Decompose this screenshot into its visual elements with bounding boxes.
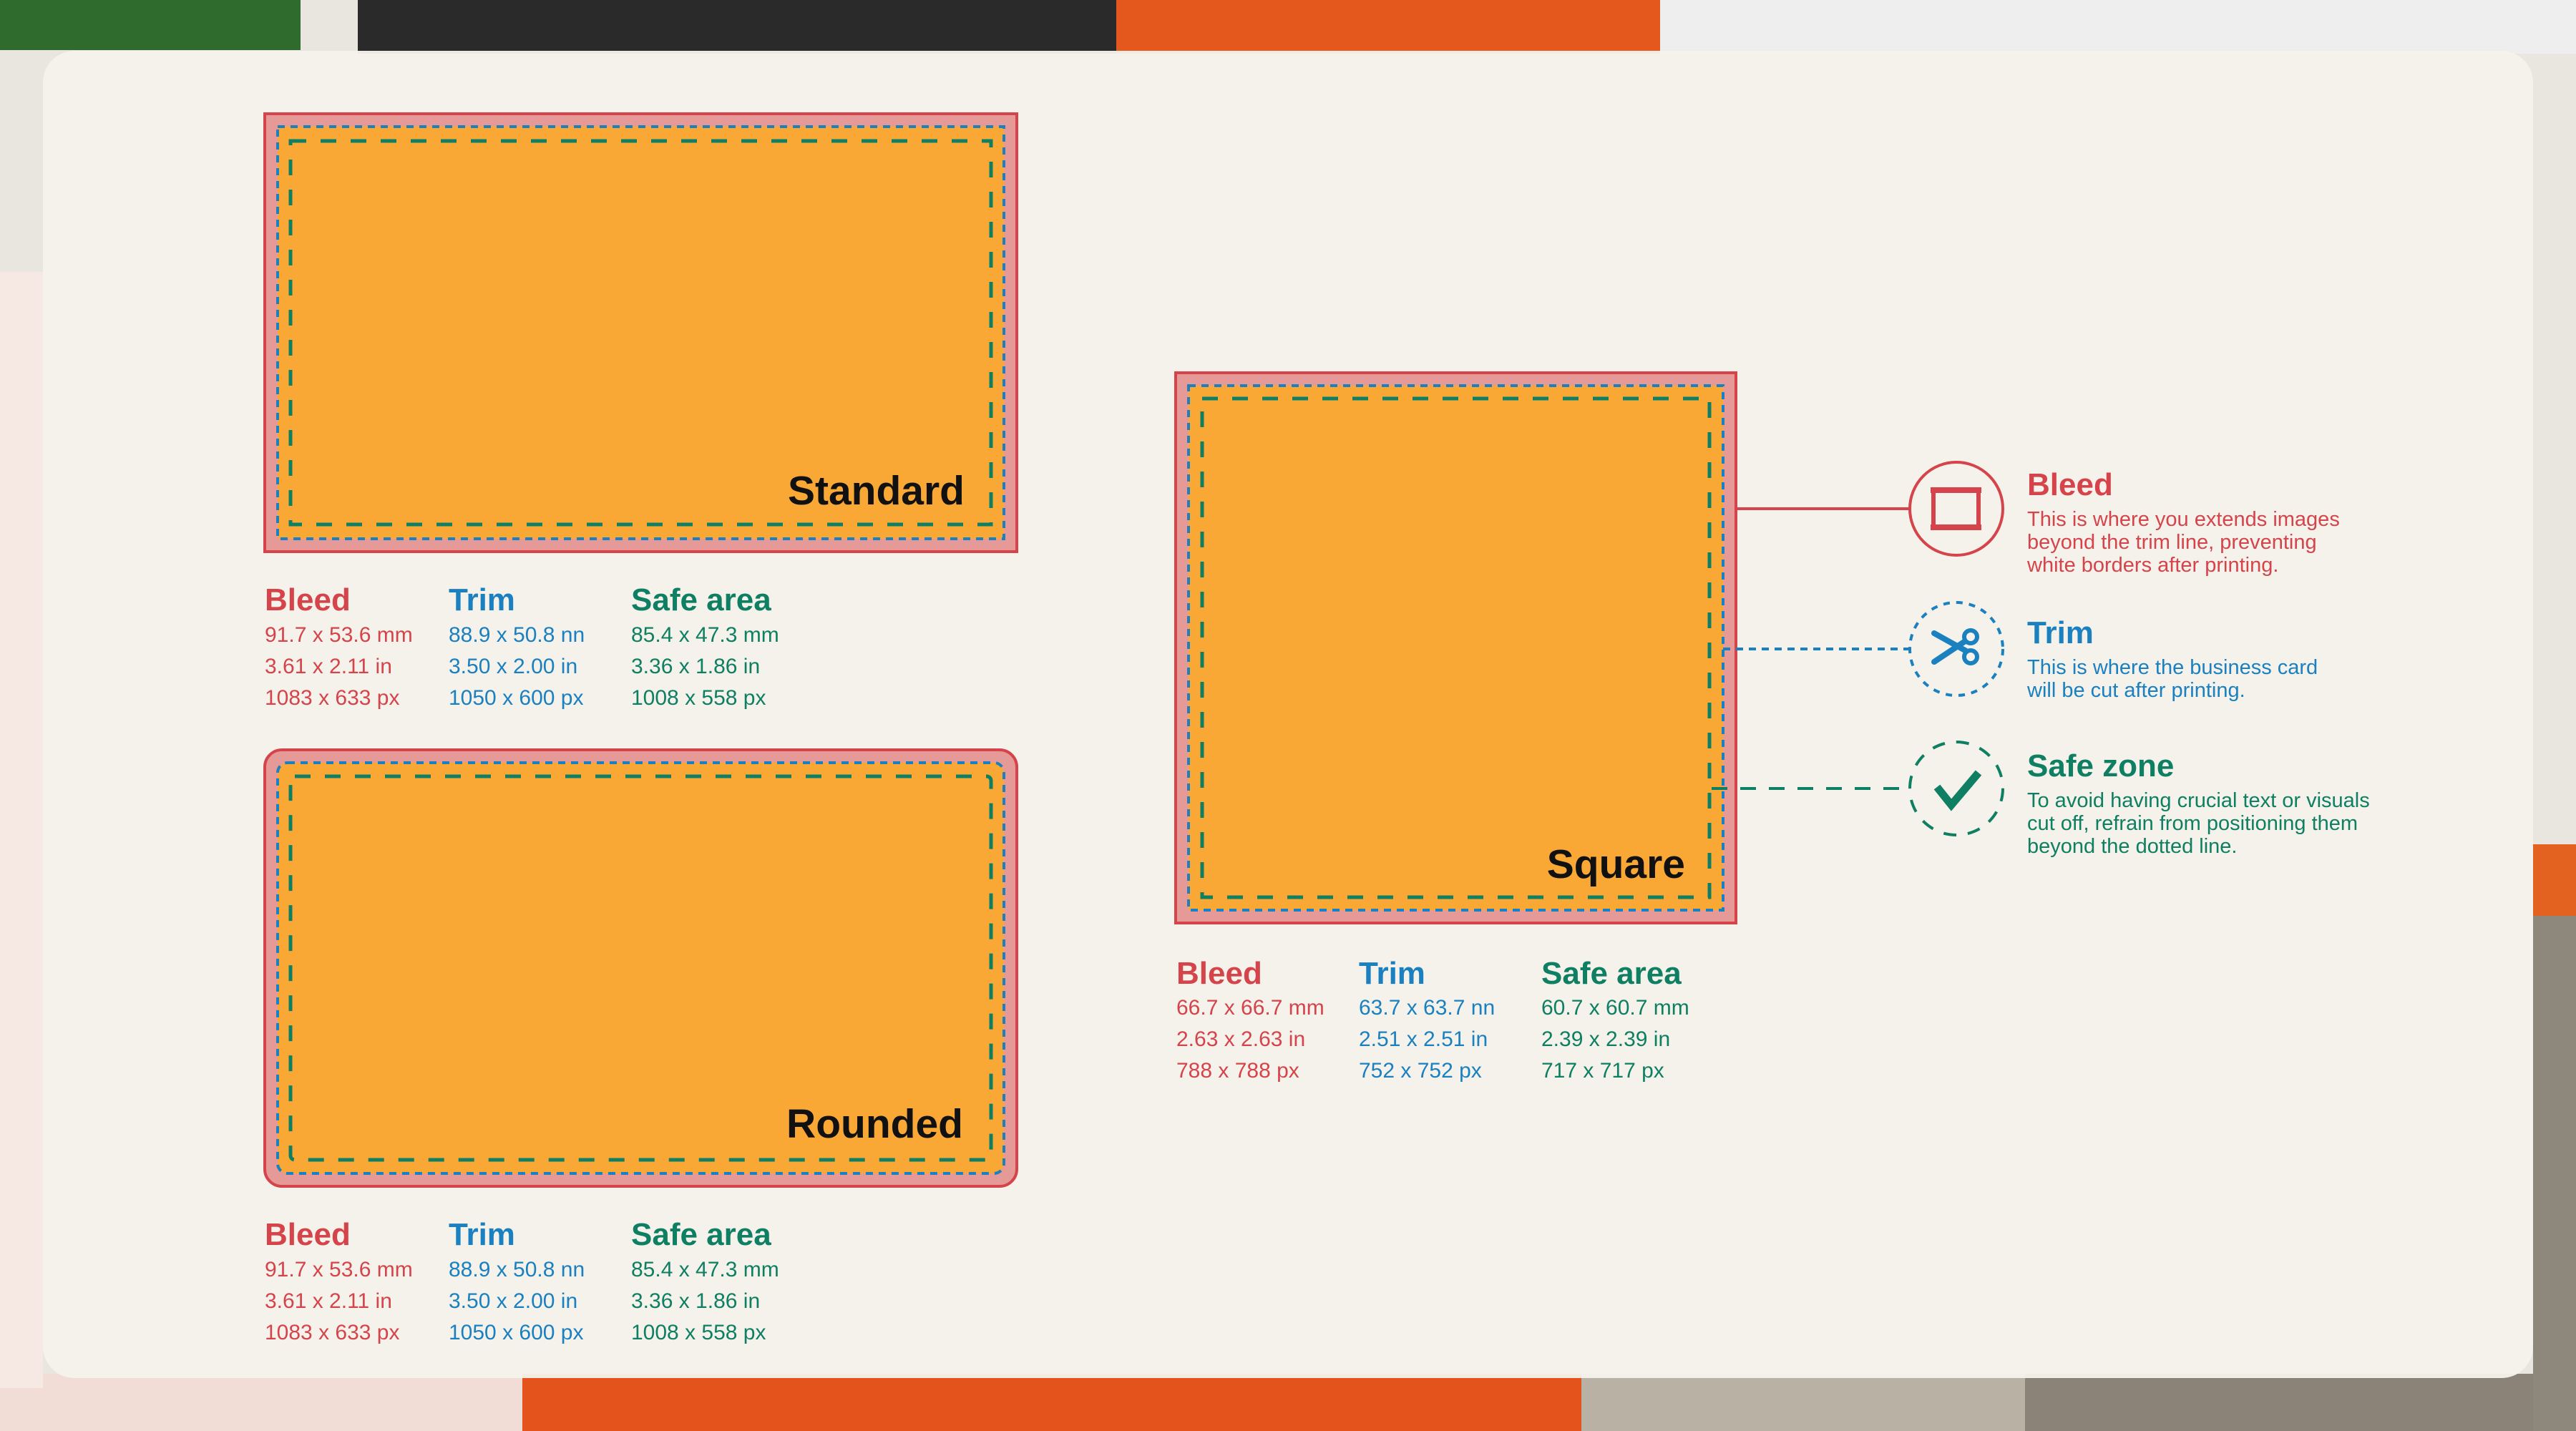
legend text: trim: Trim xyxy=(2027,615,2094,650)
specs: square: 788 x 788 px xyxy=(1176,1059,1299,1083)
icon: trim scissors xyxy=(1910,602,2003,695)
specs: square: 752 x 752 px xyxy=(1359,1059,1482,1083)
specs: standard: 85.4 x 47.3 mm xyxy=(631,623,779,647)
specs: square: 2.39 x 2.39 in xyxy=(1541,1027,1670,1051)
connector: trim line xyxy=(1723,648,1910,650)
specs: standard: 1050 x 600 px xyxy=(449,686,583,710)
legend text: trim: This is where the business card xyxy=(2027,656,2318,679)
legend text: bleed: white borders after printing. xyxy=(2026,554,2278,577)
specs: standard: Bleed xyxy=(265,582,351,617)
icon: bleed xyxy=(1910,462,2003,555)
specs: rounded: 88.9 x 50.8 nn xyxy=(449,1258,585,1281)
legend text: bleed xyxy=(2026,467,2340,577)
specs: square: 2.63 x 2.63 in xyxy=(1176,1027,1305,1051)
specs: rounded: 1050 x 600 px xyxy=(449,1321,583,1344)
card: rounded xyxy=(265,750,1017,1186)
specs: rounded xyxy=(265,1217,779,1344)
specs: square: Safe area xyxy=(1541,956,1682,991)
specs: standard: 3.50 x 2.00 in xyxy=(449,655,577,678)
label: Rounded: Rounded xyxy=(786,1101,963,1147)
specs: rounded: 3.50 x 2.00 in xyxy=(449,1289,577,1313)
specs: square: 66.7 x 66.7 mm xyxy=(1176,996,1324,1020)
specs: rounded: 91.7 x 53.6 mm xyxy=(265,1258,413,1281)
specs: standard: Safe area xyxy=(631,582,771,617)
specs: rounded: 3.61 x 2.11 in xyxy=(265,1289,392,1313)
specs: standard: 91.7 x 53.6 mm xyxy=(265,623,413,647)
specs: square xyxy=(1176,956,1689,1083)
specs: rounded: 3.36 x 1.86 in xyxy=(631,1289,760,1313)
legend text: bleed: Bleed xyxy=(2027,467,2113,502)
legend text: trim: will be cut after printing. xyxy=(2026,679,2245,702)
specs: rounded: 1083 x 633 px xyxy=(265,1321,399,1344)
icon: safe check xyxy=(1910,742,2003,835)
specs: square: 60.7 x 60.7 mm xyxy=(1541,996,1689,1020)
legend text: trim xyxy=(2026,615,2318,702)
card: square xyxy=(1176,373,1736,923)
specs: rounded: 1008 x 558 px xyxy=(631,1321,766,1344)
card: standard xyxy=(265,114,1017,552)
specs: standard: 88.9 x 50.8 nn xyxy=(449,623,585,647)
specs: rounded: 85.4 x 47.3 mm xyxy=(631,1258,779,1281)
specs: standard: 1083 x 633 px xyxy=(265,686,399,710)
specs: standard: 1008 x 558 px xyxy=(631,686,766,710)
specs: standard: 3.36 x 1.86 in xyxy=(631,655,760,678)
specs: standard xyxy=(265,582,779,710)
specs: standard: Trim xyxy=(449,582,515,617)
label: Square: Square xyxy=(1547,841,1685,887)
legend text: safe zone: beyond the dotted line. xyxy=(2027,835,2237,858)
specs: square: 2.51 x 2.51 in xyxy=(1359,1027,1488,1051)
legend text: bleed: beyond the trim line, preventing xyxy=(2027,531,2317,554)
specs: standard: 3.61 x 2.11 in xyxy=(265,655,392,678)
legend text: safe zone: cut off, refrain from positioning them xyxy=(2027,812,2358,835)
specs: square: 63.7 x 63.7 nn xyxy=(1359,996,1495,1020)
legend text: safe zone xyxy=(2027,748,2370,858)
specs: square: Trim xyxy=(1359,956,1425,991)
specs: square: Bleed xyxy=(1176,956,1262,991)
legend text: safe zone: To avoid having crucial text or visuals xyxy=(2027,789,2370,812)
legend text: safe zone: Safe zone xyxy=(2027,748,2174,783)
specs: rounded: Safe area xyxy=(631,1217,771,1252)
specs: rounded: Trim xyxy=(449,1217,515,1252)
connector: bleed line xyxy=(1737,507,1910,510)
specs: square: 717 x 717 px xyxy=(1541,1059,1664,1083)
specs: rounded: Bleed xyxy=(265,1217,351,1252)
connector: safe line xyxy=(1712,787,1910,790)
label: Standard: Standard xyxy=(788,468,965,514)
legend text: bleed: This is where you extends images xyxy=(2027,508,2340,531)
